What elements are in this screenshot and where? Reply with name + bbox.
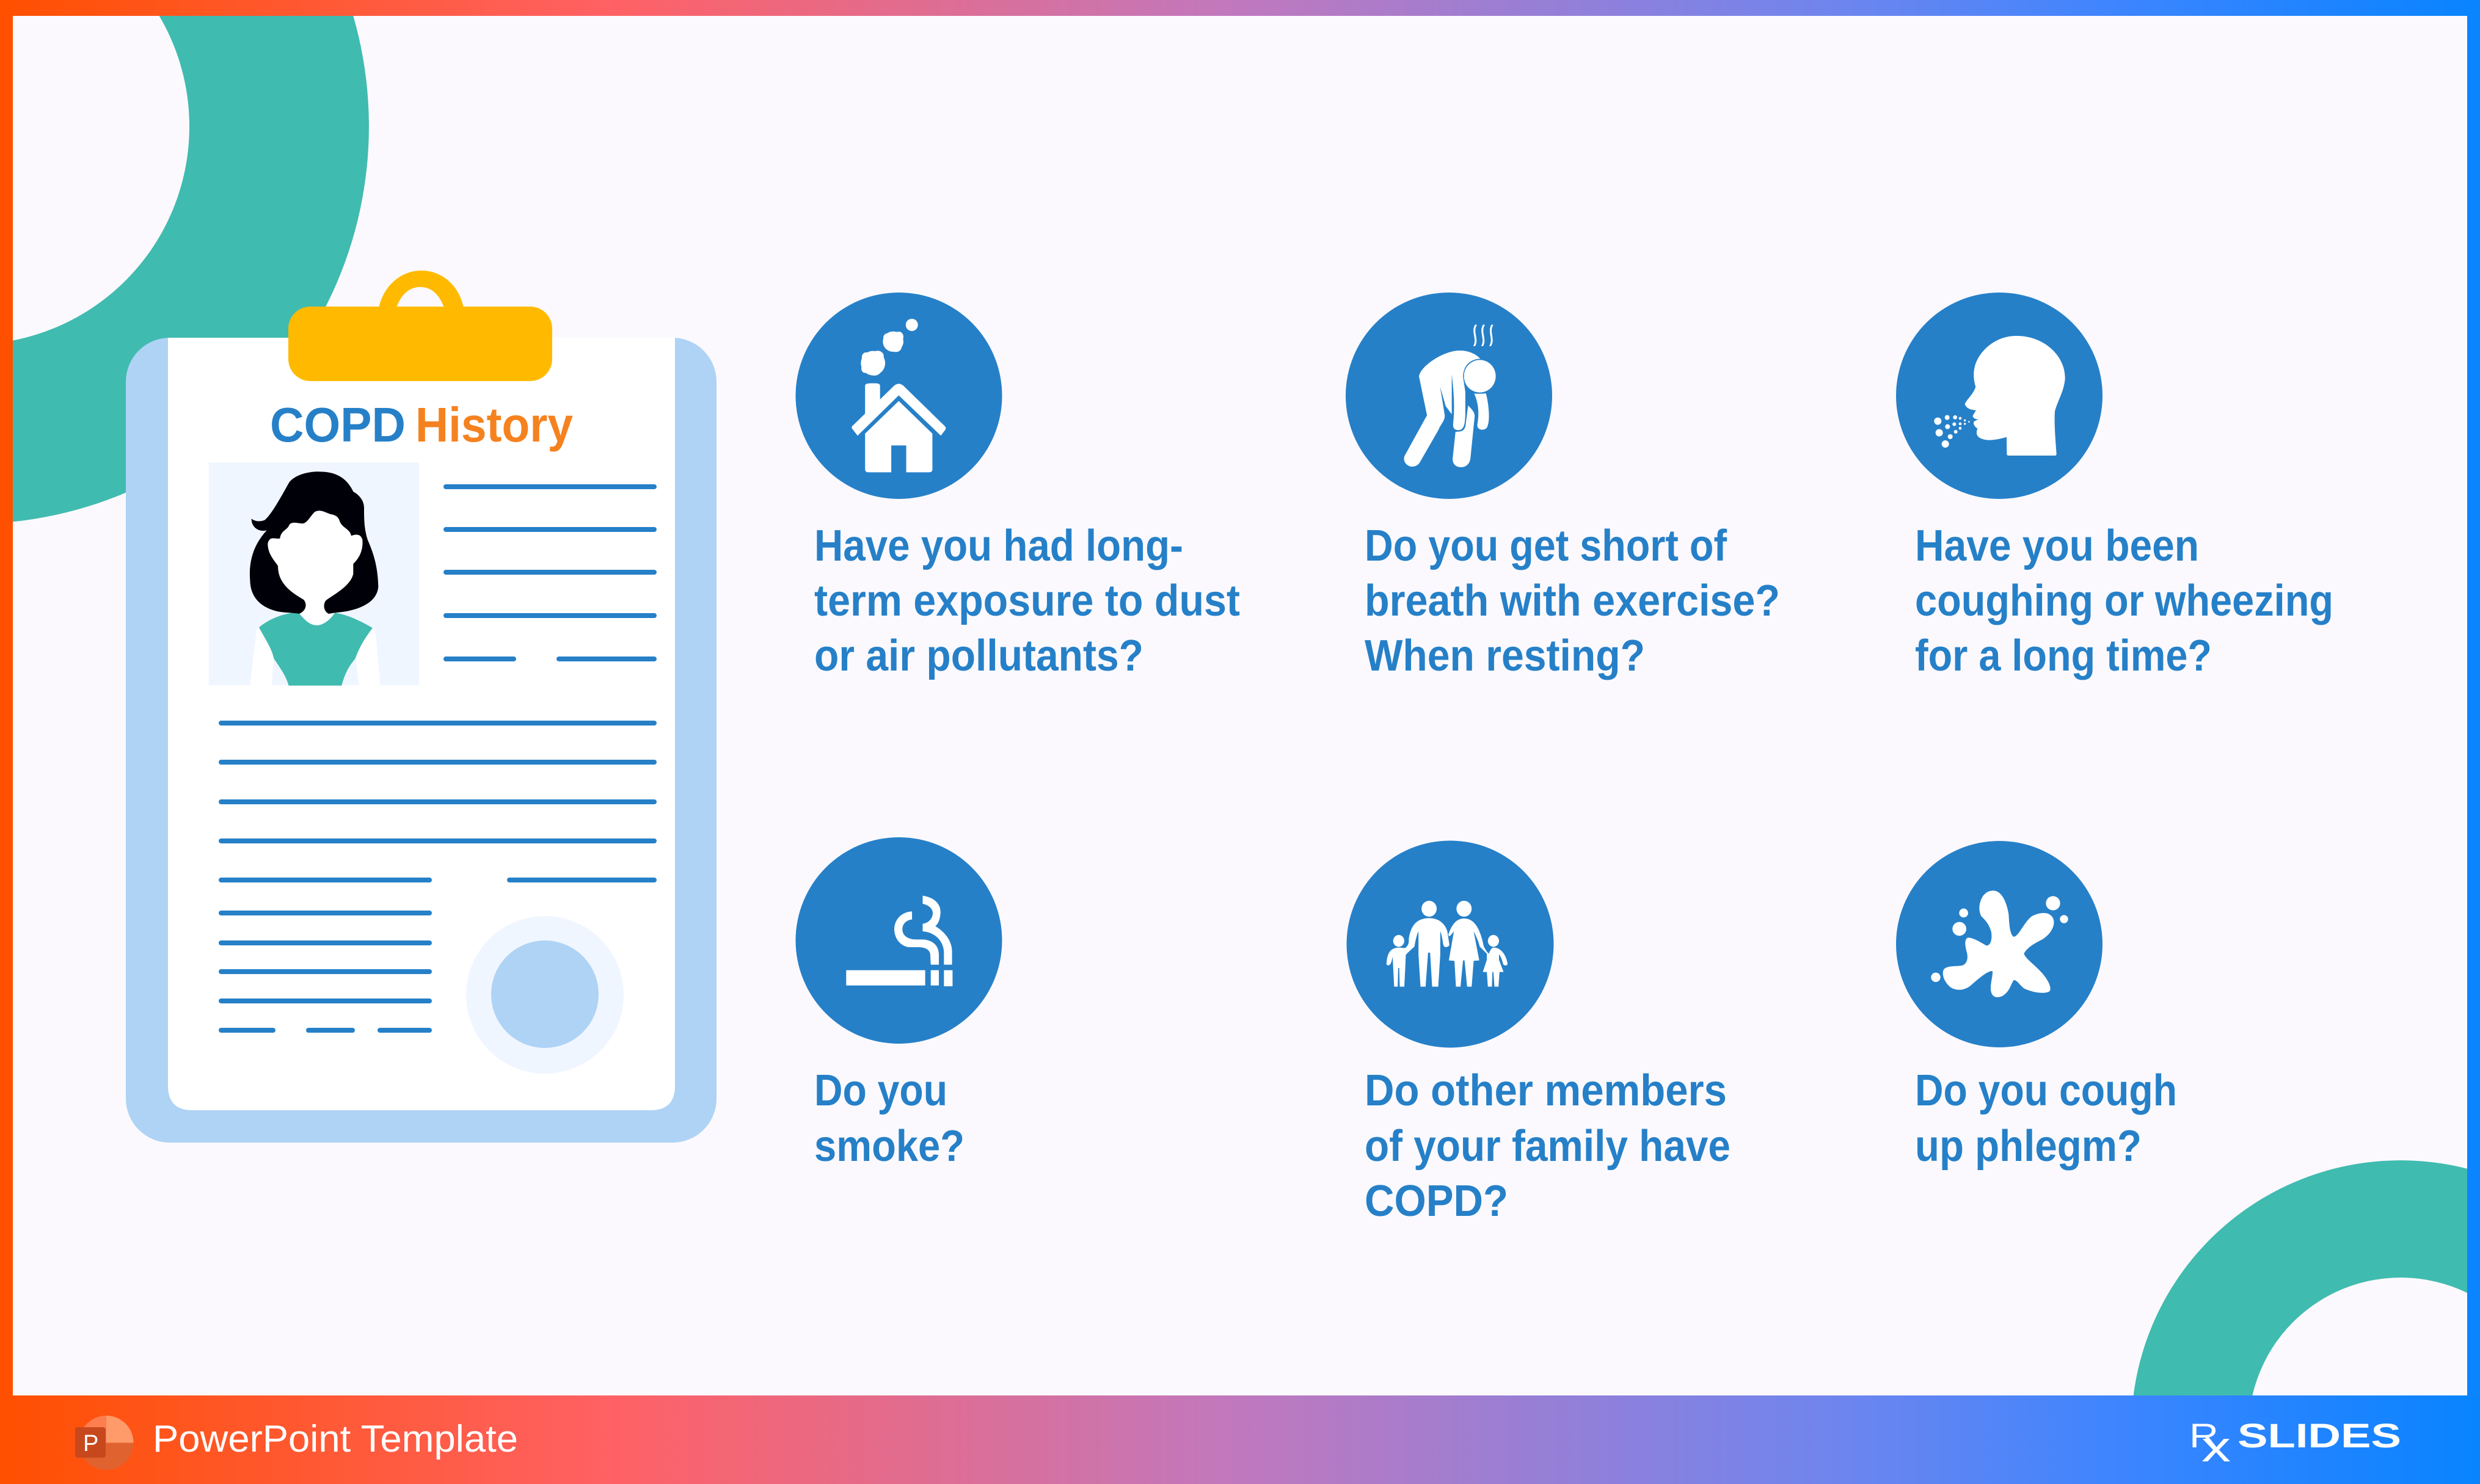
item: coughing phlegm [1896, 841, 2177, 1171]
question text: smoke? [814, 1122, 965, 1171]
question text: COPD? [1365, 1177, 1508, 1226]
question text: for a long time? [1915, 631, 2212, 680]
gradient frame: top bar [0, 0, 2480, 16]
question text: When resting? [1365, 631, 1645, 680]
question text: Have you been [1915, 522, 2199, 570]
form title [270, 398, 573, 452]
clip bar [288, 307, 552, 381]
question text [1365, 522, 1780, 680]
question text: Do you cough [1915, 1066, 2177, 1115]
logo: Rx Slides: SLIDES [2237, 1416, 2401, 1455]
item: smoking [795, 837, 1002, 1171]
stamp seal [466, 916, 624, 1074]
form title: History [415, 398, 573, 452]
panel: clipboard with COPD History form [126, 271, 717, 1143]
question text: Do you [814, 1066, 947, 1115]
form lines beside photo [446, 487, 654, 659]
form lines: body text [221, 723, 654, 1030]
footer band [0, 1395, 2480, 1484]
logo: Rx Slides [2189, 1416, 2401, 1471]
question text [814, 522, 1240, 680]
icon: cigarette with smoke [795, 837, 1002, 1044]
question text [1915, 522, 2333, 680]
paper sheet [168, 338, 675, 1110]
icon: person bent over breathing hard [1346, 293, 1552, 499]
question text: Have you had long- [814, 522, 1183, 570]
question text [814, 1066, 965, 1171]
icon: house with chimney smoke [795, 293, 1002, 499]
question text: term exposure to dust [814, 577, 1240, 625]
item: coughing or wheezing [1896, 293, 2333, 680]
question text: Do other members [1365, 1066, 1727, 1115]
question text: coughing or wheezing [1915, 577, 2333, 625]
clipboard board [126, 338, 717, 1143]
question text: or air pollutants? [814, 631, 1143, 680]
item: shortness of breath [1346, 293, 1780, 680]
question text: up phlegm? [1915, 1122, 2142, 1171]
icon: PowerPoint logo: P [83, 1431, 98, 1457]
gradient frame: left bar [0, 0, 13, 1484]
patient photo [209, 462, 419, 686]
question text: breath with exercise? [1365, 577, 1780, 625]
icon: head profile coughing droplets [1896, 293, 2103, 499]
icon: PowerPoint logo [75, 1416, 133, 1470]
decorative teal ring: bottom right [2134, 1160, 2467, 1395]
item: family history [1346, 840, 1731, 1226]
question text [1365, 1066, 1731, 1226]
question text: of your family have [1365, 1122, 1731, 1171]
item: dust and pollutants [795, 293, 1240, 680]
icon: family of four [1346, 840, 1554, 1048]
question text: Do you get short of [1365, 522, 1727, 570]
icon: phlegm splat [1896, 841, 2103, 1047]
decorative teal ring: top left [13, 16, 369, 522]
gradient frame: right bar [2467, 0, 2480, 1484]
footer label: PowerPoint Template [153, 1418, 518, 1460]
question text [1915, 1066, 2177, 1171]
form title: COPD [270, 398, 406, 452]
logo: Rx Slides: x [2201, 1423, 2231, 1471]
clip ring [378, 271, 464, 311]
logo: Rx Slides: R [2189, 1416, 2219, 1455]
